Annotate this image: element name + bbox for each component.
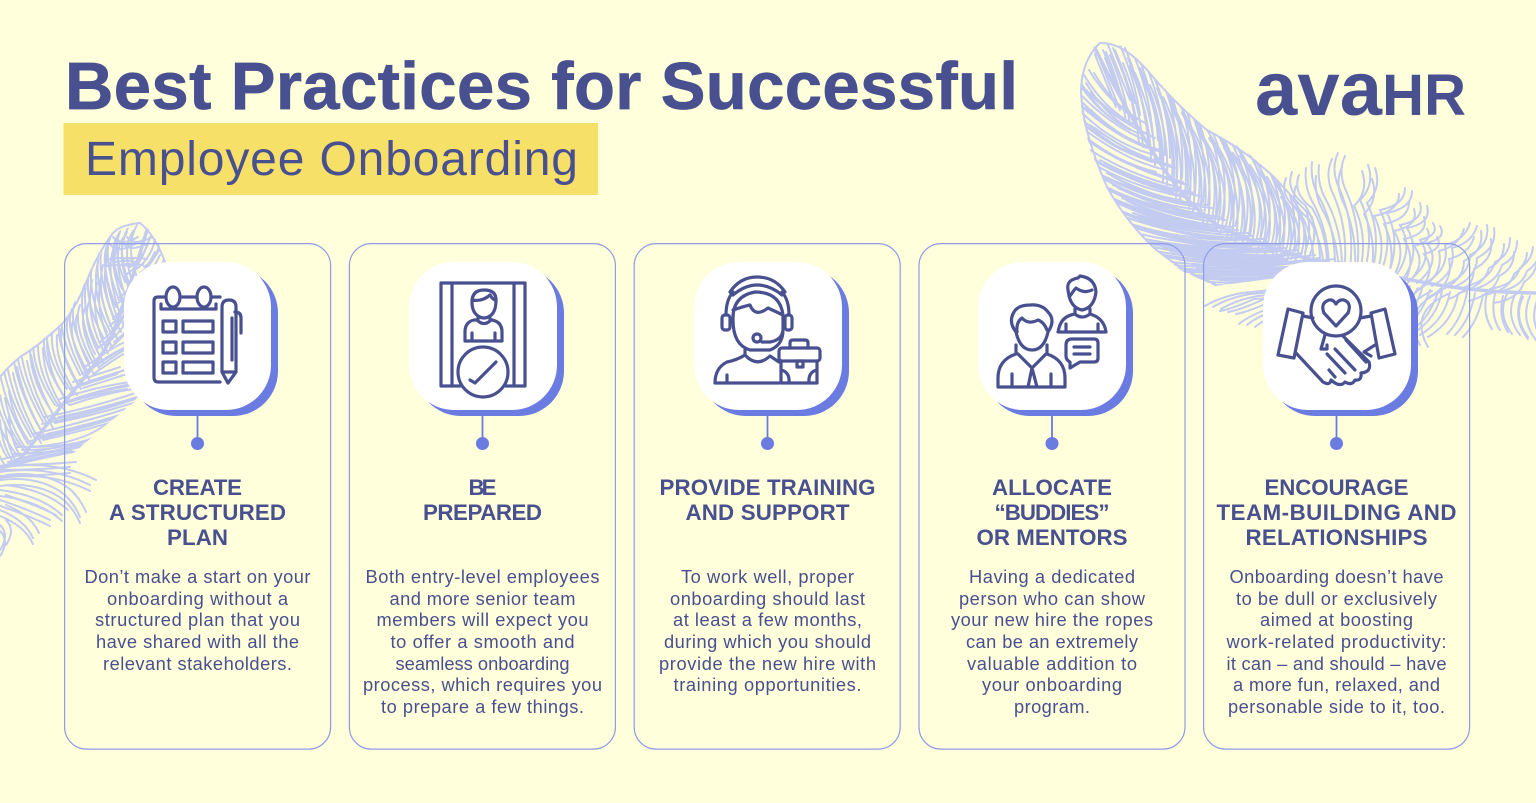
- connector dot: [761, 416, 774, 450]
- body text: during which you should: [664, 631, 871, 652]
- decorative feather top right: [1072, 43, 1536, 347]
- body text: onboarding without a: [107, 588, 289, 609]
- body text: to offer a smooth and: [390, 631, 574, 652]
- body text: aimed at boosting: [1260, 609, 1413, 630]
- body text: person who can show: [959, 588, 1146, 609]
- body text: members will expect you: [376, 609, 588, 630]
- body text: Onboarding doesn’t have: [1230, 566, 1444, 587]
- body text: have shared with all the: [96, 631, 299, 652]
- body text: personable side to it, too.: [1228, 696, 1445, 717]
- subtitle banner: Employee Onboarding: [85, 133, 578, 186]
- panel: provide training and support: [634, 244, 900, 749]
- body text: [84, 566, 310, 674]
- body text: it can – and should – have: [1226, 653, 1446, 674]
- connector dot: [476, 416, 489, 450]
- heading: [1216, 475, 1456, 550]
- body text: your new hire the ropes: [951, 609, 1153, 630]
- heading: ALLOCATE: [992, 475, 1112, 500]
- body text: at least a few months,: [673, 609, 862, 630]
- panel: encourage team-building and relationships: [1204, 244, 1470, 749]
- heading: AND SUPPORT: [686, 500, 850, 525]
- connector dot: [1330, 416, 1343, 450]
- logo: avaHR: [1255, 47, 1466, 132]
- body text: to be dull or exclusively: [1236, 588, 1438, 609]
- body text: valuable addition to: [967, 653, 1137, 674]
- body text: work-related productivity:: [1226, 631, 1446, 652]
- connector dot: [1046, 416, 1058, 450]
- body text: and more senior team: [390, 588, 576, 609]
- body text: to prepare a few things.: [381, 696, 584, 717]
- body text: [659, 566, 876, 695]
- heading: PLAN: [167, 525, 228, 550]
- icon: handshake with heart: [1263, 262, 1418, 416]
- heading: [423, 475, 542, 525]
- body text: Both entry-level employees: [366, 566, 600, 587]
- heading: A STRUCTURED: [109, 500, 286, 525]
- heading: BE: [468, 475, 496, 500]
- heading: [109, 475, 286, 550]
- panel: create a structured plan: [65, 244, 331, 749]
- subtitle banner: [64, 123, 598, 195]
- body text: [363, 566, 602, 717]
- title: Best Practices for Successful: [65, 49, 1018, 124]
- body text: training opportunities.: [674, 674, 862, 695]
- body text: Having a dedicated: [969, 566, 1135, 587]
- icon: clipboard with pen: [124, 262, 278, 416]
- body text: structured plan that you: [95, 609, 300, 630]
- body text: Don’t make a start on your: [84, 566, 310, 587]
- heading: ENCOURAGE: [1264, 475, 1408, 500]
- body text: your onboarding: [982, 674, 1122, 695]
- body text: process, which requires you: [363, 674, 602, 695]
- heading: [976, 475, 1128, 550]
- body text: a more fun, relaxed, and: [1233, 674, 1440, 695]
- body text: onboarding should last: [670, 588, 865, 609]
- body text: can be an extremely: [966, 631, 1139, 652]
- panel: allocate buddies or mentors: [919, 244, 1185, 749]
- decorative feather left: [0, 223, 169, 556]
- heading: PREPARED: [423, 500, 542, 525]
- icon: mentor and buddy with speech bubble: [978, 262, 1133, 416]
- heading: [660, 475, 876, 525]
- icon: candidate profile with check: [409, 262, 564, 416]
- body text: [951, 566, 1153, 717]
- heading: RELATIONSHIPS: [1246, 525, 1428, 550]
- body text: seamless onboarding: [396, 653, 570, 674]
- body text: To work well, proper: [681, 566, 854, 587]
- body text: [1226, 566, 1446, 717]
- body text: provide the new hire with: [659, 653, 876, 674]
- heading: PROVIDE TRAINING: [660, 475, 876, 500]
- connector dot: [191, 416, 204, 450]
- heading: TEAM-BUILDING AND: [1216, 500, 1456, 525]
- heading: “BUDDIES”: [994, 500, 1110, 525]
- heading: OR MENTORS: [976, 525, 1128, 550]
- body text: relevant stakeholders.: [103, 653, 292, 674]
- body text: program.: [1014, 696, 1090, 717]
- panel: be prepared: [349, 244, 615, 749]
- heading: CREATE: [153, 475, 242, 500]
- icon: person with headset and briefcase: [694, 262, 849, 416]
